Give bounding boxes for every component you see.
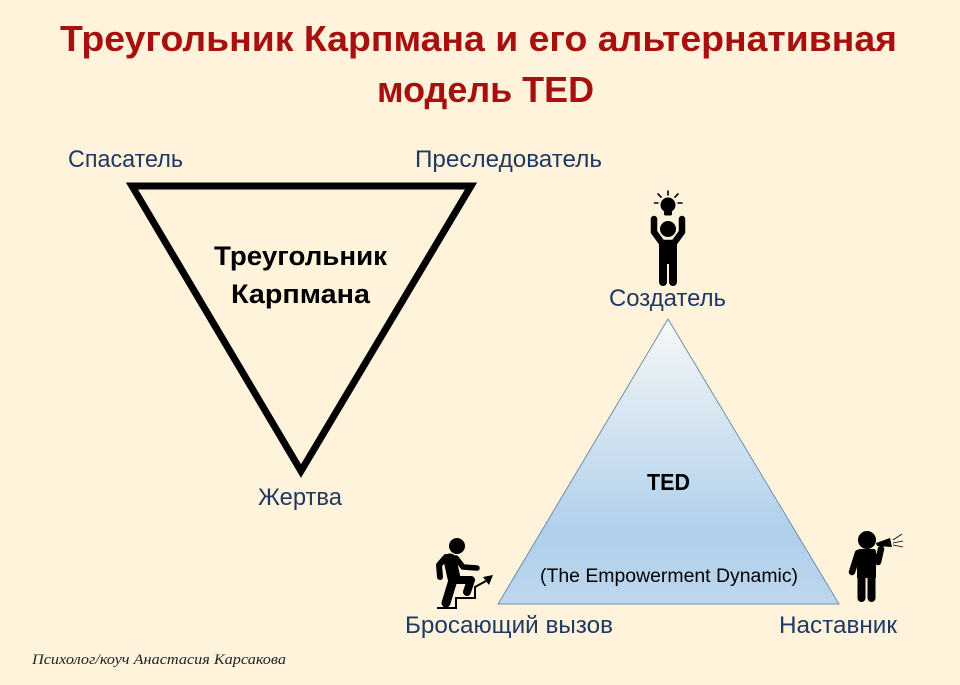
TED subtitle: (The Empowerment Dynamic) bbox=[540, 566, 798, 587]
Karpman triangle label: Треугольник bbox=[214, 241, 387, 271]
title: модель TED bbox=[377, 69, 594, 110]
Karpman triangle bbox=[132, 186, 471, 471]
title bbox=[60, 18, 897, 110]
icon: person climbing stairs bbox=[437, 538, 493, 608]
Karpman triangle label: Карпмана bbox=[231, 279, 371, 309]
icon: person with megaphone bbox=[852, 531, 903, 598]
label: Жертва: Жертва bbox=[258, 484, 343, 511]
icon: creator with light bulb bbox=[654, 191, 682, 282]
title: Треугольник Карпмана и его альтернативная bbox=[60, 18, 897, 59]
TED triangle bbox=[498, 319, 839, 604]
label: Спасатель: Спасатель bbox=[68, 146, 183, 173]
label: Преследователь: Преследователь bbox=[415, 146, 602, 173]
label: Создатель: Создатель bbox=[609, 285, 726, 312]
label: Наставник: Наставник bbox=[779, 612, 897, 639]
author credit: Психолог/коуч Анастасия Карсакова bbox=[31, 652, 286, 668]
label: Бросающий вызов: Бросающий вызов bbox=[405, 612, 613, 639]
TED label: TED bbox=[647, 469, 690, 495]
